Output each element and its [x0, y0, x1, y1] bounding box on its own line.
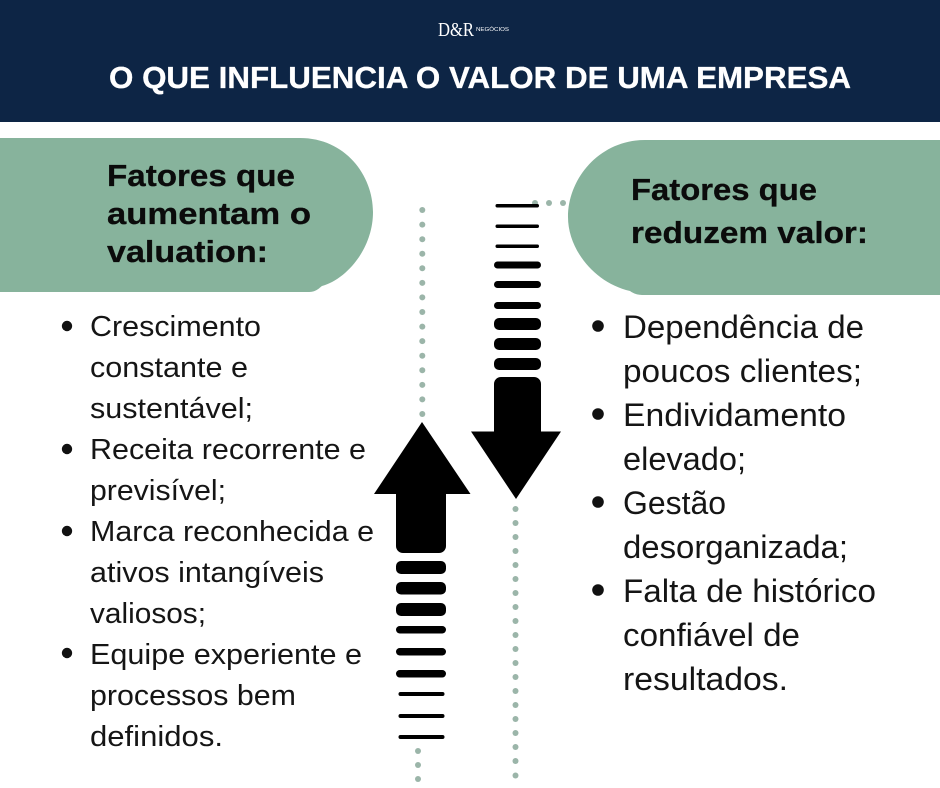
arrow: down [471, 204, 561, 499]
logo: NEGÓCIOS [476, 26, 510, 33]
list: positive factors: definidos. [90, 721, 223, 753]
heading: factors that increase [107, 158, 311, 269]
list: negative factors: Gestão [623, 485, 726, 521]
list: positive factors: previsível; [90, 475, 226, 507]
list: negative factors: elevado; [623, 441, 746, 477]
arrow: up [374, 422, 470, 739]
panel: increases valuation heading [0, 138, 373, 292]
list: negative factors: resultados. [623, 661, 788, 697]
list: positive factors: constante e [90, 352, 248, 384]
heading: factors that increase: valuation: [107, 234, 268, 269]
list: negative factors: poucos clientes; [623, 353, 862, 389]
list: positive factors: Marca reconhecida e [90, 516, 374, 548]
dotted line: right [512, 200, 566, 778]
list: negative factors: Falta de histórico [623, 573, 876, 609]
list: negative factors: Dependência de [623, 309, 864, 345]
list: positive factors: Equipe experiente e [90, 639, 362, 671]
heading: factors that reduce [631, 172, 868, 250]
panel: reduces value heading [568, 140, 940, 295]
list: positive factors: Receita recorrente e [90, 434, 366, 466]
list: negative factors: desorganizada; [623, 529, 848, 565]
heading: factors that increase: Fatores que [107, 158, 295, 193]
logo [438, 19, 510, 41]
logo: D&R [438, 19, 475, 41]
heading: factors that reduce: Fatores que [631, 172, 817, 207]
header band [0, 0, 940, 122]
list: positive factors: Crescimento [90, 311, 261, 343]
list: positive factors: valiosos; [90, 598, 206, 630]
list: negative factors [592, 309, 876, 697]
heading: factors that increase: aumentam o [107, 196, 311, 231]
list: negative factors: Endividamento [623, 397, 846, 433]
list: positive factors: processos bem [90, 680, 296, 712]
dotted line: left vertical [415, 207, 425, 782]
heading: factors that reduce: reduzem valor: [631, 215, 868, 250]
list: positive factors [62, 311, 374, 753]
list: negative factors: confiável de [623, 617, 800, 653]
list: positive factors: sustentável; [90, 393, 253, 425]
title: O QUE INFLUENCIA O VALOR DE UMA EMPRESA [109, 60, 851, 95]
list: positive factors: ativos intangíveis [90, 557, 324, 589]
